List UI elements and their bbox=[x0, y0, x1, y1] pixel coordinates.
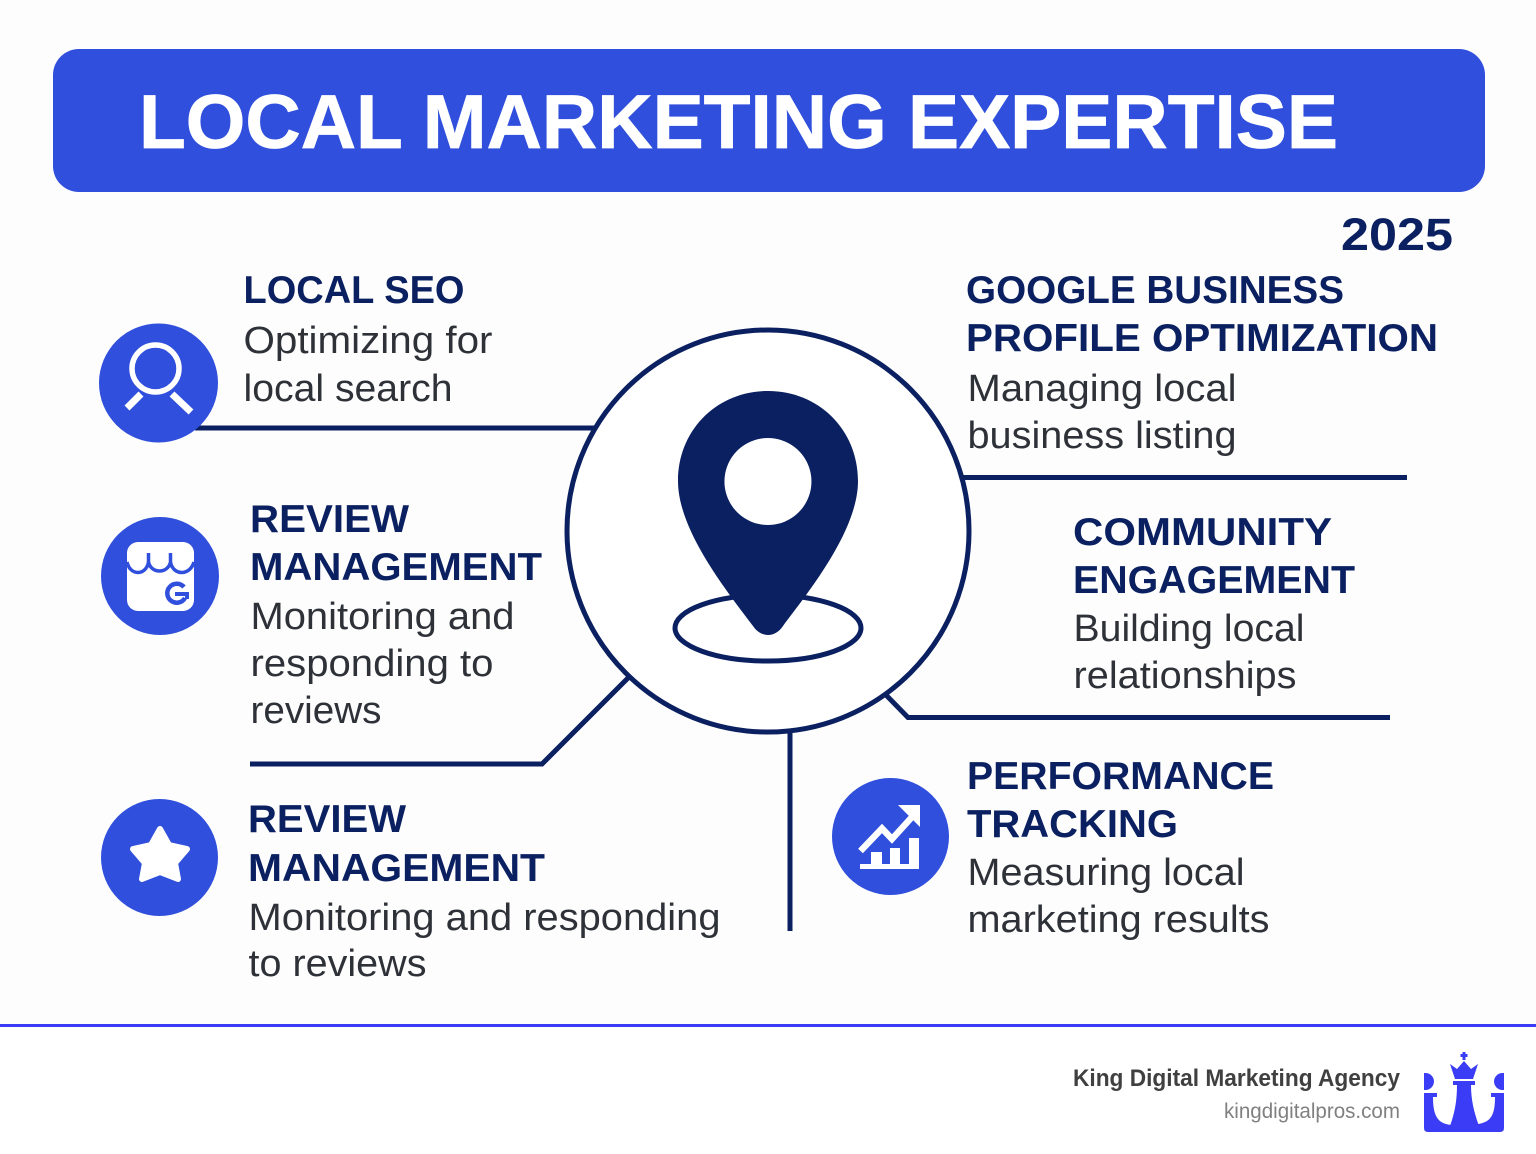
central location pin badge bbox=[567, 330, 969, 732]
website: kingdigitalpros.com bbox=[1224, 1100, 1400, 1123]
heading: GOOGLE BUSINESS bbox=[966, 269, 1344, 312]
heading: REVIEW bbox=[250, 498, 409, 541]
panel: review management with storefront: responding to bbox=[250, 643, 494, 685]
title banner bbox=[53, 49, 1485, 192]
panel: review management with star: to reviews bbox=[248, 943, 426, 985]
pin bbox=[678, 391, 858, 635]
description: Optimizing for bbox=[244, 320, 493, 362]
panel: google business profile optimization bbox=[966, 269, 1438, 457]
logo bbox=[1424, 1052, 1504, 1132]
description: Monitoring and responding bbox=[248, 897, 720, 939]
heading: PERFORMANCE bbox=[967, 755, 1274, 798]
panel: google business profile optimization: business listing bbox=[968, 415, 1236, 457]
panel: performance tracking bbox=[832, 755, 1274, 941]
icon: star bbox=[101, 799, 218, 916]
year: 2025 bbox=[1341, 209, 1453, 260]
connector lines bbox=[195, 428, 1407, 931]
icon: magnifying glass bbox=[99, 324, 218, 442]
heading: LOCAL SEO bbox=[244, 269, 464, 312]
panel: community engagement: ENGAGEMENT bbox=[1073, 559, 1355, 602]
panel: performance tracking: marketing results bbox=[968, 899, 1270, 941]
panel: review management with storefront: MANAGEMENT bbox=[250, 546, 542, 589]
panel: community engagement bbox=[1073, 511, 1355, 697]
panel: review management with star: MANAGEMENT bbox=[248, 847, 545, 890]
title: LOCAL MARKETING EXPERTISE bbox=[139, 80, 1338, 165]
footer rule bbox=[0, 1024, 1536, 1027]
icon: google storefront bbox=[101, 517, 219, 635]
panel: review management with storefront bbox=[101, 498, 542, 732]
description: Building local bbox=[1074, 608, 1304, 650]
panel: local seo: local search bbox=[244, 368, 452, 410]
description: Managing local bbox=[968, 368, 1236, 410]
agency name: King Digital Marketing Agency bbox=[1073, 1065, 1401, 1092]
heading: REVIEW bbox=[248, 798, 406, 841]
panel: performance tracking: TRACKING bbox=[967, 803, 1178, 846]
description: Measuring local bbox=[968, 852, 1244, 894]
footer brand bbox=[1073, 1052, 1504, 1132]
base ring bbox=[675, 595, 861, 661]
panel: review management with storefront: reviews bbox=[250, 690, 382, 732]
panel: community engagement: relationships bbox=[1074, 655, 1296, 697]
panel: local seo bbox=[99, 269, 493, 442]
icon: growth chart bbox=[832, 778, 949, 895]
panel: google business profile optimization: PROFILE OPTIMIZATION bbox=[966, 317, 1438, 360]
description: Monitoring and bbox=[250, 596, 514, 638]
heading: COMMUNITY bbox=[1073, 511, 1332, 554]
panel: review management with star bbox=[101, 798, 720, 985]
